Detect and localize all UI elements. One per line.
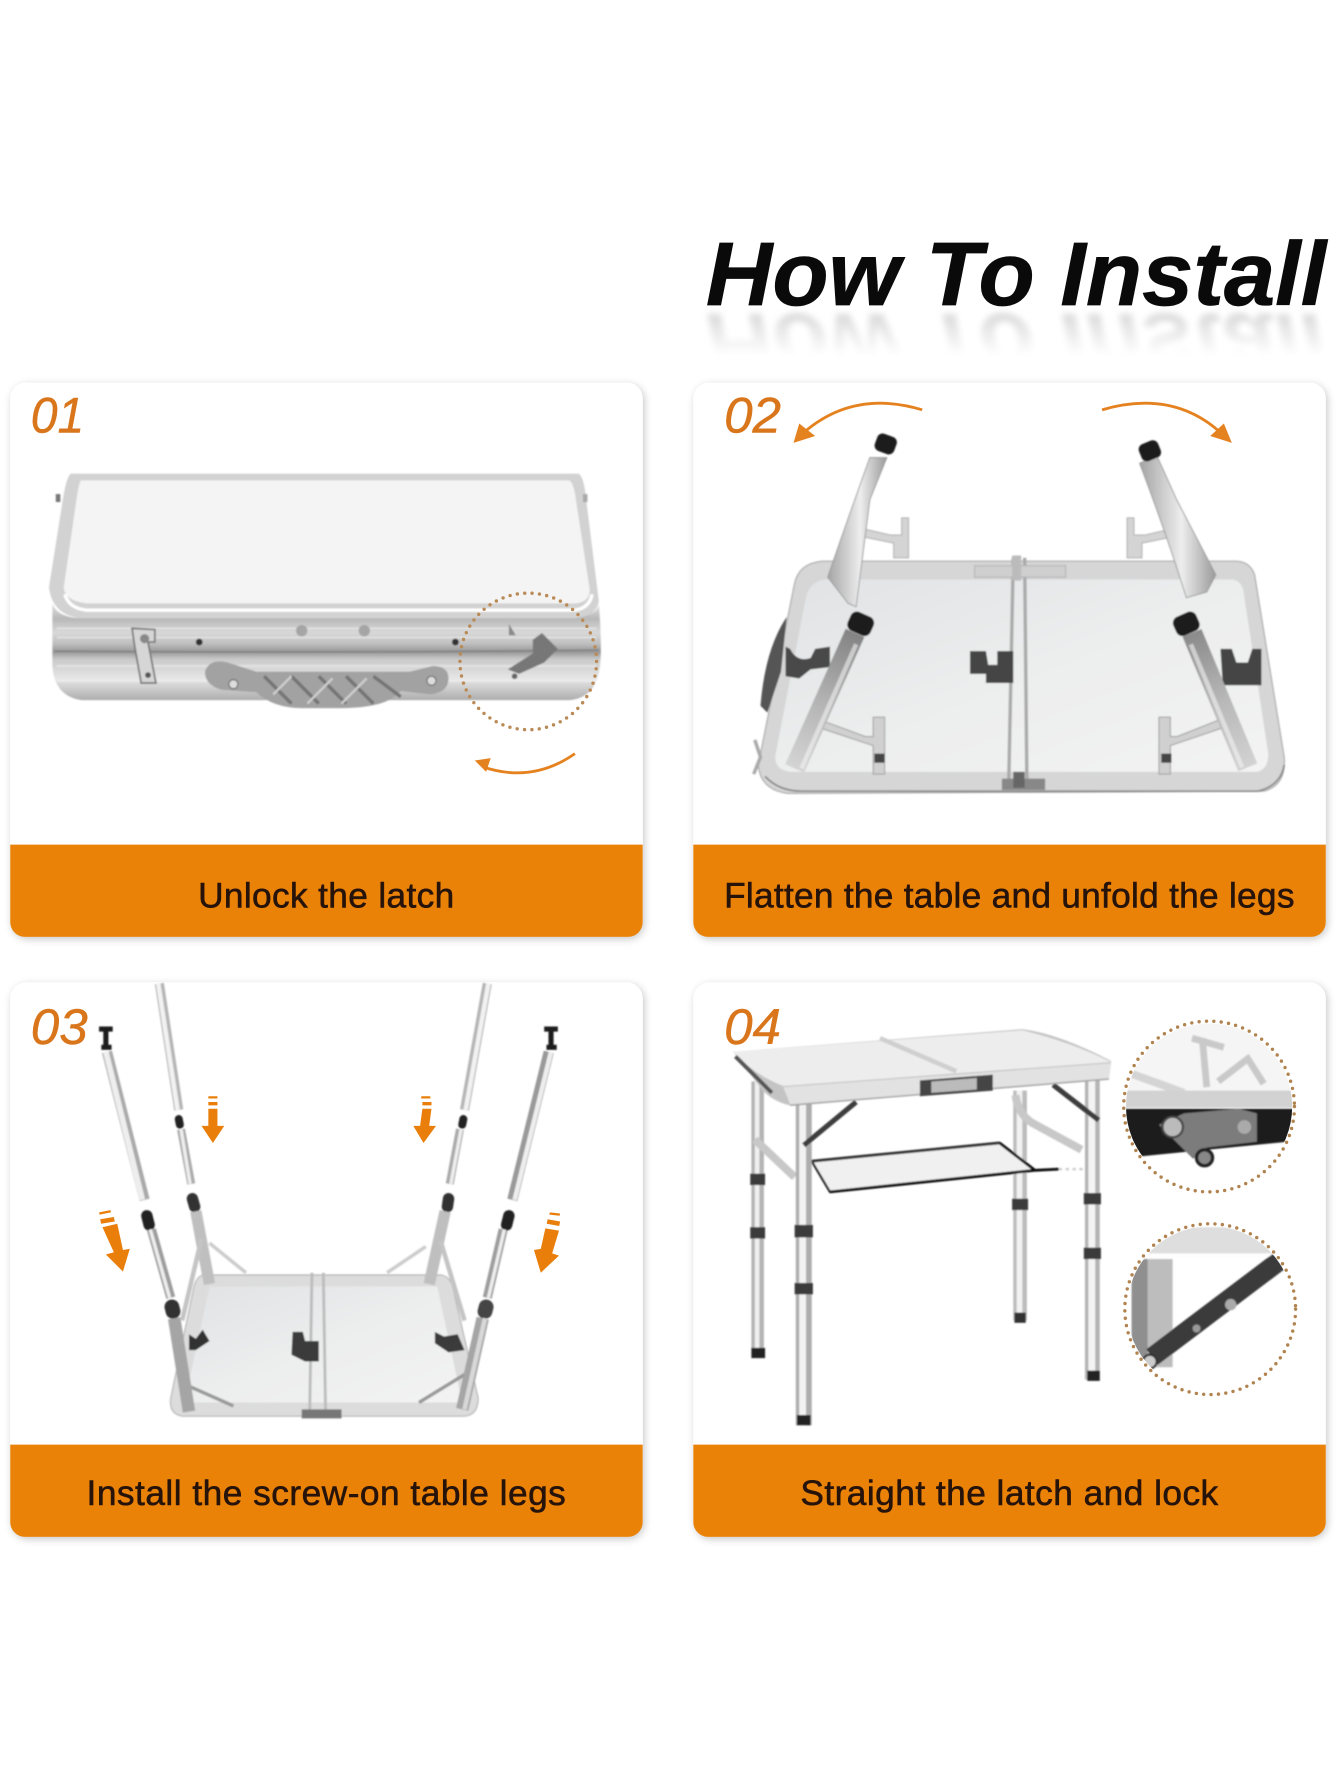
card (693, 382, 1326, 937)
arrow: left (794, 403, 922, 443)
handle (205, 661, 449, 708)
banner (10, 1445, 643, 1537)
hanging net shelf (812, 1143, 1083, 1192)
step number: 03 (31, 999, 88, 1055)
caption: Install the screw-on table legs (87, 1474, 566, 1513)
illustration: open table with legs (754, 432, 1284, 793)
card (10, 382, 643, 937)
centre hinge (1009, 558, 1027, 785)
title: How To Install (706, 294, 1328, 394)
leg: inner right (387, 984, 488, 1321)
caption: Flatten the table and unfold the legs (724, 876, 1294, 915)
dark clips (786, 647, 830, 678)
card (693, 982, 1326, 1537)
panel: step 02 (693, 382, 1326, 937)
front legs (795, 1076, 1101, 1425)
left latch (132, 628, 156, 683)
fold-out brackets (850, 518, 909, 558)
caption: Unlock the latch (198, 876, 454, 915)
panel: step 01 (10, 382, 643, 937)
illustration: table with screw-on legs (99, 984, 558, 1418)
infographic: how to install (8, 239, 1332, 1543)
step number: 01 (31, 388, 84, 444)
callout: latch detail (1121, 1021, 1298, 1192)
title (706, 225, 1328, 394)
arrow: right (1102, 403, 1232, 443)
card (10, 982, 643, 1537)
front latch (920, 1075, 993, 1096)
banner (693, 845, 1326, 937)
dotted callout circle (460, 593, 597, 730)
folding braces (804, 1085, 1099, 1145)
side handle (761, 617, 787, 713)
right latch (508, 633, 558, 674)
dark clips (189, 1330, 209, 1350)
back legs (750, 1081, 1082, 1358)
banner (693, 1445, 1326, 1537)
step number: 02 (724, 388, 781, 444)
callout: brace detail (1121, 1224, 1298, 1395)
leg: inner left (158, 984, 246, 1321)
panel: step 04 (693, 982, 1326, 1537)
front legs (795, 609, 1248, 768)
banner (10, 845, 643, 937)
panel: step 03 (10, 982, 643, 1537)
leg: outer left (99, 1029, 189, 1412)
caption: Straight the latch and lock (800, 1474, 1219, 1513)
arrows: dashed orange (99, 1096, 560, 1273)
step number: 04 (724, 999, 781, 1055)
title: How To Install (706, 225, 1328, 325)
rivets (196, 639, 203, 645)
illustration: closed table case (49, 474, 601, 708)
leg: outer right (462, 1029, 558, 1409)
table top (733, 1029, 1111, 1105)
arrow (475, 754, 575, 773)
illustration: assembled table (733, 1029, 1111, 1425)
back legs (828, 432, 1216, 607)
